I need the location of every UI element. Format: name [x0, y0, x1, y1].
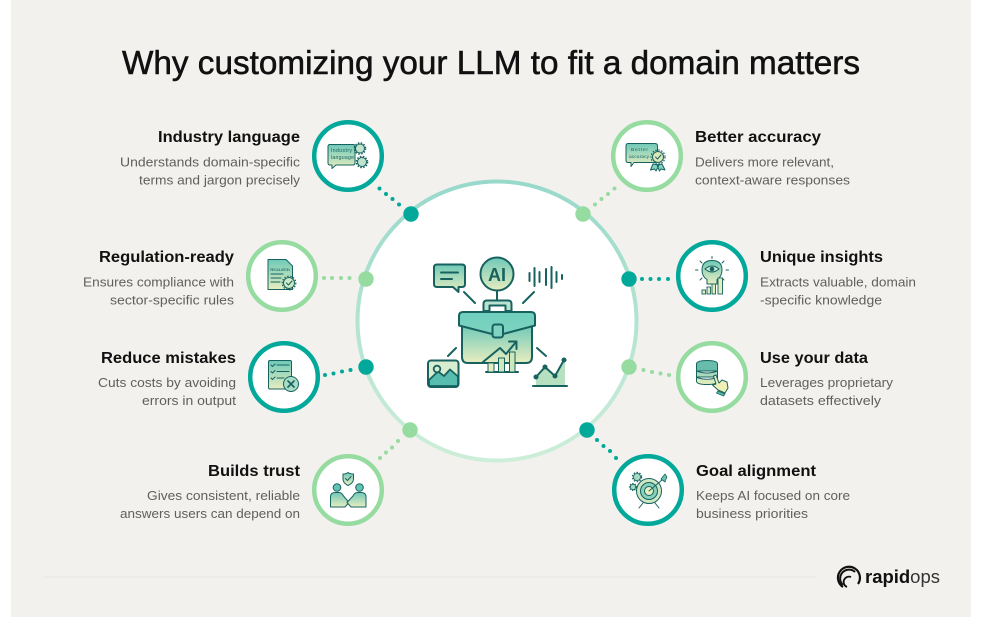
heading: Regulation-ready — [99, 249, 234, 266]
icon: target with gears — [614, 456, 682, 524]
icon: AI badge: AI — [488, 265, 506, 285]
icon: speech bubble with award — [613, 122, 681, 190]
description: business priorities — [696, 506, 809, 521]
heading: Use your data — [760, 350, 868, 367]
logo mark — [838, 567, 860, 587]
item: Industry language — [120, 122, 382, 190]
icon: checklist with x — [250, 343, 318, 411]
heading: Reduce mistakes — [101, 350, 236, 367]
icon: database and hand — [678, 343, 746, 411]
connector dots: green — [322, 186, 671, 460]
description: Cuts costs by avoiding — [98, 375, 236, 390]
icon: chat bubble — [434, 264, 465, 292]
description: -specific knowledge — [760, 292, 882, 308]
item: Regulation-ready — [83, 242, 316, 310]
item: Use your data — [678, 343, 894, 411]
icon: regulation document: REGULATION — [270, 268, 290, 272]
heading: Goal alignment — [696, 463, 817, 480]
wordmark: rapidops — [865, 567, 940, 587]
icon: image — [428, 360, 458, 387]
heading: Better accuracy — [695, 129, 821, 146]
icon: regulation document — [248, 242, 316, 310]
connectors — [448, 292, 546, 356]
central icon: briefcase with AI — [428, 258, 567, 387]
icon: speech bubble with gears — [314, 122, 382, 190]
description: datasets effectively — [760, 393, 882, 408]
logo: rapidops — [838, 567, 940, 587]
icon: speech bubble with gears: Industry — [331, 148, 352, 154]
description: context-aware responses — [695, 172, 851, 188]
connector dots: teal — [323, 186, 670, 460]
item: Builds trust — [120, 456, 382, 524]
description: Delivers more relevant, — [695, 154, 834, 170]
item: Unique insights — [678, 242, 916, 310]
icon: bar chart with arrow — [483, 342, 518, 372]
heading: Builds trust — [208, 463, 301, 480]
description: Keeps AI focused on core — [696, 488, 850, 503]
description: sector-specific rules — [110, 292, 235, 308]
icon: speech bubble with gears: language — [331, 155, 354, 161]
description: errors in output — [142, 393, 236, 408]
icon: speech bubble with award: accuracy — [629, 154, 650, 160]
icon: waveform — [530, 267, 562, 288]
heading: Unique insights — [760, 249, 883, 266]
item: Goal alignment — [614, 456, 850, 524]
icon: briefcase — [459, 300, 535, 363]
item: Better accuracy — [613, 122, 851, 190]
description: Ensures compliance with — [83, 274, 234, 290]
icon: handshake and shield — [314, 456, 382, 524]
title: Why customizing your LLM to fit a domain matters — [122, 44, 860, 81]
icon: line chart — [533, 358, 567, 386]
description: answers users can depend on — [120, 506, 300, 521]
description: Leverages proprietary — [760, 375, 894, 390]
item: Reduce mistakes — [98, 343, 318, 411]
description: Gives consistent, reliable — [147, 488, 300, 503]
central circle — [358, 182, 636, 460]
description: Extracts valuable, domain — [760, 274, 916, 290]
heading: Industry language — [158, 129, 300, 146]
icon: speech bubble with award: Better — [631, 147, 648, 153]
description: Understands domain-specific — [120, 154, 301, 170]
description: terms and jargon precisely — [139, 172, 301, 188]
icon: light bulb with eye and bars — [678, 242, 746, 310]
